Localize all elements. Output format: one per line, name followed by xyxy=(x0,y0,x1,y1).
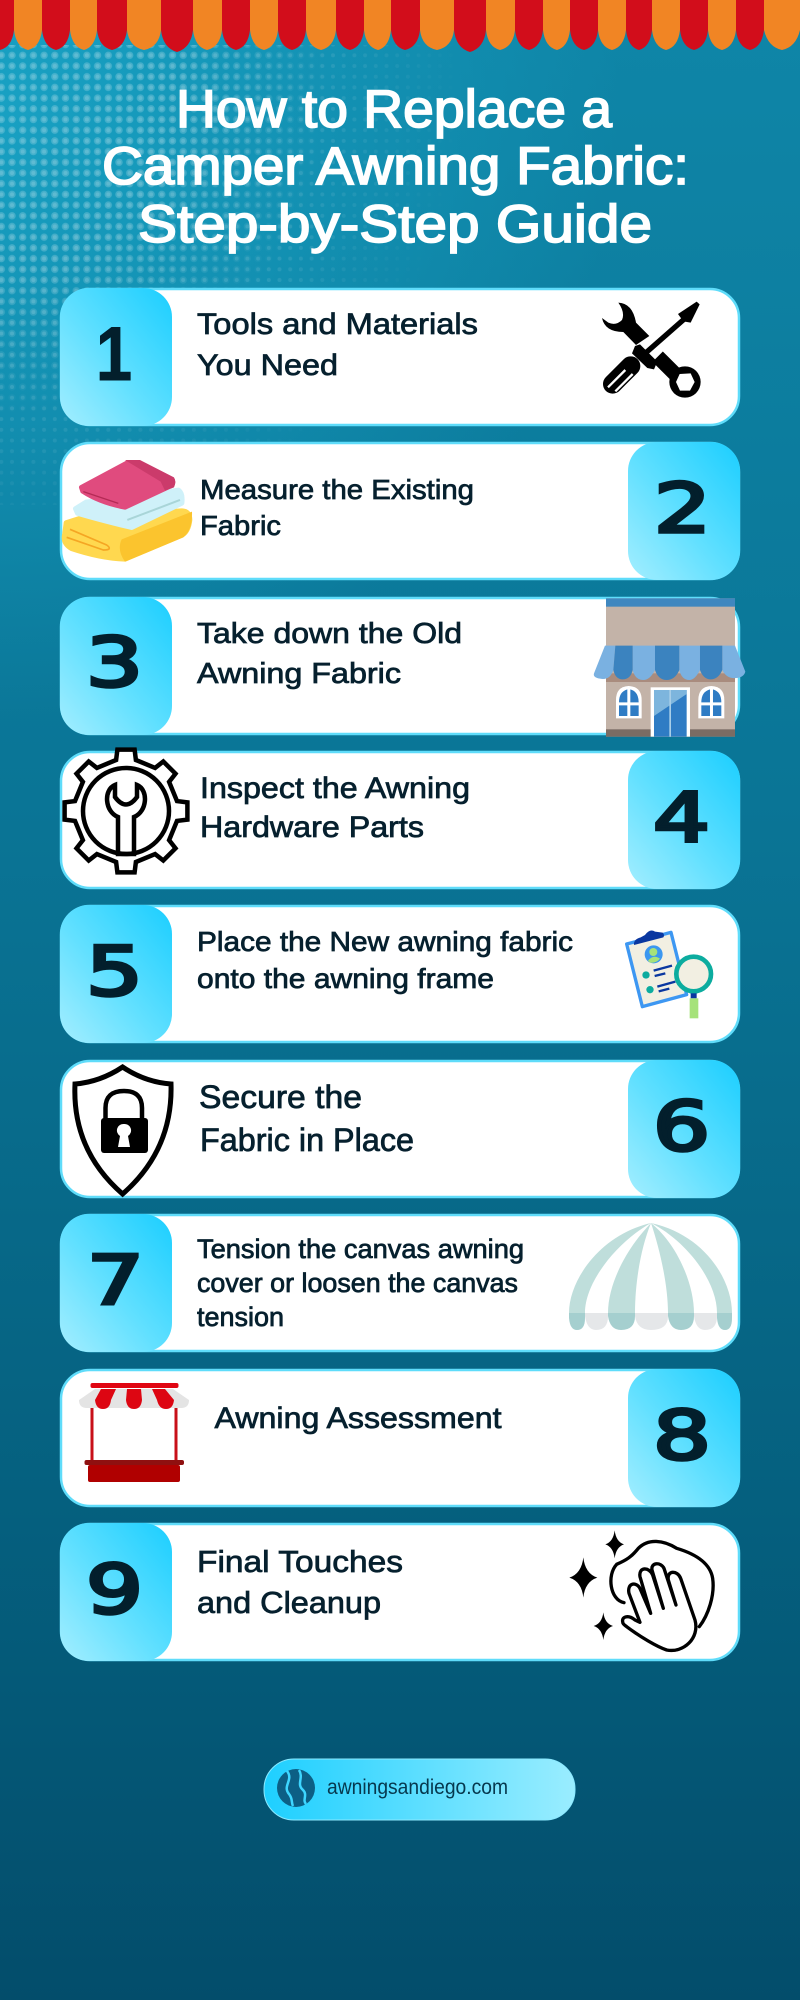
step 2 text: Fabric xyxy=(200,510,281,541)
number tile 5: 5 xyxy=(86,933,143,1012)
number tile 7: 7 xyxy=(87,1242,144,1321)
striped awning header xyxy=(0,0,800,52)
panel: step 1 xyxy=(60,288,739,426)
icon: clipboard and magnifying glass xyxy=(627,931,711,1018)
panel: step 3 xyxy=(60,597,745,737)
step 9 text: Final Touches xyxy=(197,1544,403,1579)
number tile 8 xyxy=(628,1369,740,1507)
number tile 4: 4 xyxy=(653,779,710,858)
number tile 2 xyxy=(628,442,740,580)
step 9 text: and Cleanup xyxy=(197,1585,381,1620)
step 8 text: Awning Assessment xyxy=(214,1402,502,1435)
step 3 text: Take down the Old xyxy=(197,618,462,650)
number tile 8: 8 xyxy=(653,1397,711,1476)
step 2 text: Measure the Existing xyxy=(200,474,474,505)
panel: step 5 xyxy=(60,905,739,1043)
website pill xyxy=(264,1759,575,1820)
panel: step 9 xyxy=(60,1523,739,1661)
number tile 6 xyxy=(628,1060,740,1198)
step 1 text: Tools and Materials xyxy=(197,308,478,341)
icon: stack of folded towels xyxy=(64,460,192,562)
panel: step 4 xyxy=(61,750,740,889)
number tile 9: 9 xyxy=(86,1551,143,1630)
step 3 text: Awning Fabric xyxy=(197,658,401,690)
title: Camper Awning Fabric: xyxy=(102,137,689,196)
website address: awningsandiego.com xyxy=(327,1776,508,1799)
step 5 text: Place the New awning fabric xyxy=(197,926,573,957)
icon: storefront with blue awning xyxy=(594,598,745,737)
number tile 7 xyxy=(60,1214,172,1352)
step 6 text: Secure the xyxy=(199,1079,362,1115)
title xyxy=(102,80,689,254)
panel: step 6 xyxy=(61,1060,740,1198)
step 4 text: Hardware Parts xyxy=(200,811,424,844)
step 5 text: onto the awning frame xyxy=(197,963,494,994)
step 1 text: You Need xyxy=(197,349,338,382)
panel: step 2 xyxy=(61,442,740,580)
number tile 5 xyxy=(60,905,172,1043)
panel: step 7 xyxy=(60,1214,739,1352)
icon: globe xyxy=(277,1769,315,1807)
number tile 2: 2 xyxy=(654,470,711,549)
icon: market stall with red awning xyxy=(79,1383,189,1482)
halftone dots xyxy=(0,45,410,504)
number tile 1: 1 xyxy=(96,312,132,397)
number tile 3 xyxy=(60,597,172,735)
icon: gear with wrench xyxy=(65,750,187,872)
icon: hand wiping with sparkles xyxy=(569,1530,713,1650)
number tile 3: 3 xyxy=(86,624,143,703)
step 7 text: Tension the canvas awning xyxy=(197,1234,524,1264)
title: Step-by-Step Guide xyxy=(138,195,652,254)
title: How to Replace a xyxy=(176,80,613,139)
icon: crossed wrench and screwdriver xyxy=(602,302,701,398)
step 7 text: cover or loosen the canvas xyxy=(197,1268,518,1298)
number tile 9 xyxy=(60,1523,172,1661)
step 6 text: Fabric in Place xyxy=(200,1122,414,1158)
number tile 4 xyxy=(628,751,740,889)
number tile 1 xyxy=(60,288,172,426)
panel: step 8 xyxy=(61,1369,740,1507)
icon: shield with padlock xyxy=(75,1067,171,1194)
number tile 6: 6 xyxy=(653,1088,710,1167)
icon: striped dome awning xyxy=(569,1223,732,1330)
step 7 text: tension xyxy=(197,1302,284,1332)
step 4 text: Inspect the Awning xyxy=(200,772,470,805)
